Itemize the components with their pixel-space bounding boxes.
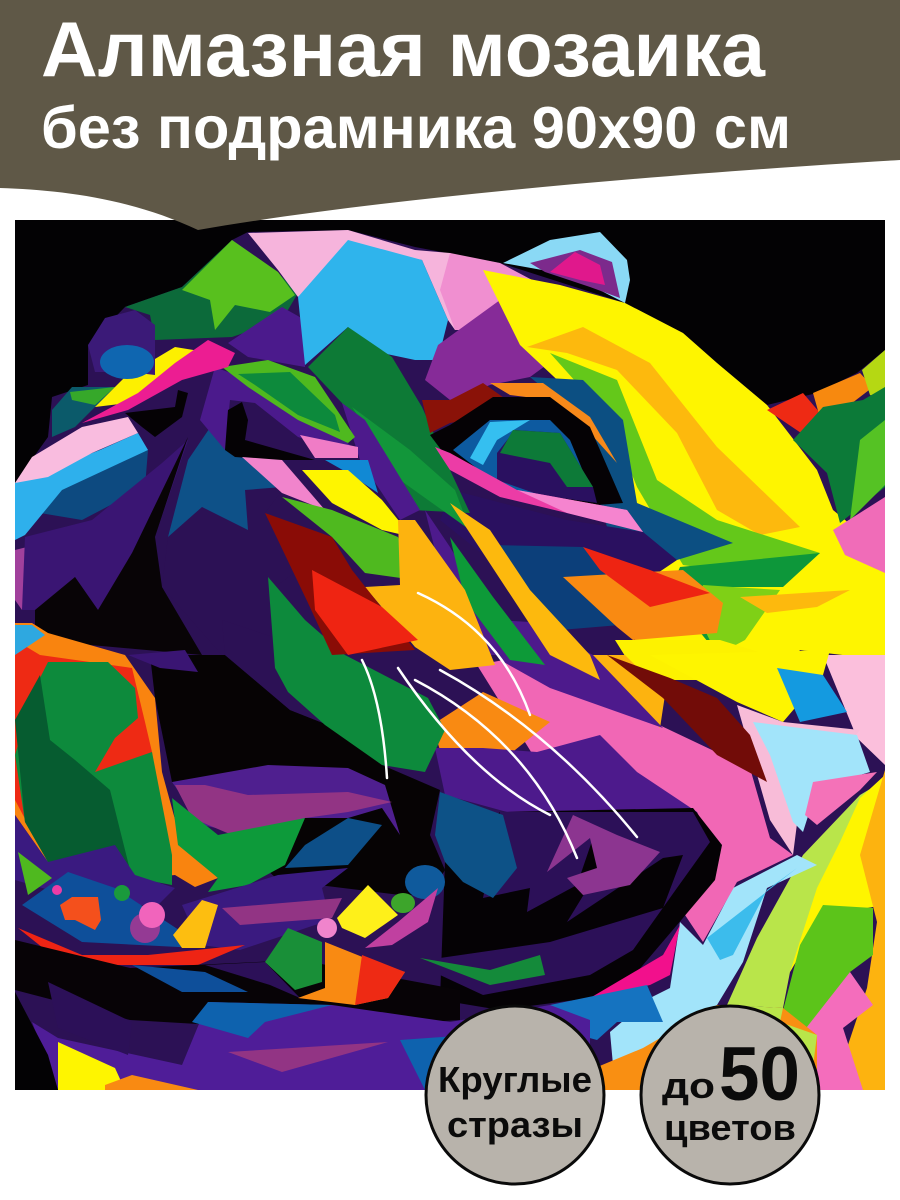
fur: light cyan bbox=[753, 722, 870, 832]
muzzle: blue patch bbox=[325, 460, 378, 493]
nose: pale pink fur bbox=[15, 417, 138, 483]
ear: blue blob bbox=[100, 345, 154, 379]
tongue: red inner bbox=[15, 640, 172, 880]
fur: light cyan lower bbox=[610, 855, 817, 1065]
chin left black bbox=[15, 992, 58, 1090]
lip: mauve bbox=[222, 898, 342, 925]
tongue: green lower bbox=[172, 798, 305, 892]
muzzle: bright red bbox=[312, 570, 418, 655]
lip: purple below tongue bbox=[182, 868, 348, 950]
lip: lime corner bbox=[18, 852, 52, 895]
tongue: mauve bbox=[175, 785, 392, 835]
nose: left strip dark bbox=[52, 387, 115, 437]
lip: red part bbox=[355, 955, 405, 1005]
ear: right back bbox=[767, 350, 885, 573]
nose: blue bbox=[168, 410, 282, 537]
painting: rainbow dog bbox=[15, 220, 885, 1090]
lip: orange bbox=[298, 942, 405, 1005]
fur: orange below eye bbox=[563, 570, 723, 640]
muzzle: purple main bbox=[435, 735, 697, 812]
tongue: green bbox=[15, 662, 172, 885]
muzzle: green stripe bbox=[450, 537, 545, 665]
muzzle: top purple bbox=[128, 650, 198, 672]
fur: lime strip bbox=[727, 788, 874, 1008]
fur: bright green stripe bbox=[352, 407, 470, 530]
fur: green lower bbox=[678, 553, 820, 640]
muzzle: mauve lip bbox=[547, 815, 660, 895]
nose: purple above bbox=[200, 367, 358, 457]
badge: up to 50 colours bbox=[641, 1006, 819, 1184]
fur: pink brow bbox=[440, 253, 531, 330]
chin orange bbox=[105, 1075, 198, 1090]
fur: orange bottom bbox=[590, 1005, 817, 1090]
muzzle: purple stripe bbox=[425, 510, 530, 655]
head silhouette bbox=[15, 230, 885, 1090]
nose: left nostril bbox=[125, 390, 188, 437]
badge: up to 50 colours: цветов bbox=[664, 1107, 796, 1148]
fur: dark blue below eye bbox=[500, 545, 616, 630]
fur: forehead dark green bbox=[125, 240, 298, 340]
muzzle: yellow fur bbox=[302, 470, 412, 537]
subtitle: без подрамника 90х90 см bbox=[41, 95, 791, 161]
nose: left mauve bbox=[15, 545, 35, 610]
fur: blue lower edge bbox=[550, 985, 663, 1040]
nose: green leaf bbox=[222, 360, 355, 443]
fur: blue tuft bbox=[777, 668, 847, 722]
chin yellow bbox=[58, 1042, 125, 1090]
fur: orange right bbox=[848, 770, 885, 1090]
nose: pink above bbox=[300, 435, 358, 458]
muzzle: black mouth bbox=[150, 655, 445, 895]
chin blue right bbox=[400, 1035, 470, 1090]
fur: red below eye bbox=[583, 547, 710, 607]
title: Алмазная мозаика bbox=[41, 5, 766, 93]
lower black band bbox=[15, 940, 460, 1030]
nose: right purple bbox=[162, 420, 300, 655]
fur: forehead blue bbox=[298, 240, 448, 377]
fur: pink tuft bottom bbox=[803, 972, 873, 1090]
ear: right top bbox=[503, 232, 630, 303]
fur: cyan stripe bbox=[707, 868, 797, 960]
fur: dark blue band bbox=[530, 377, 733, 560]
nose: dark blue left bbox=[22, 450, 148, 520]
chin blue bbox=[192, 1002, 332, 1038]
badge: round rhinestones: стразы bbox=[447, 1104, 583, 1145]
nose: light blue fur bbox=[15, 433, 148, 540]
muzzle: dark purple jowl bbox=[440, 812, 710, 995]
fur: lower right pink bbox=[823, 655, 885, 765]
fur: forehead pink bbox=[248, 230, 455, 330]
tongue: dark green bbox=[15, 675, 130, 870]
fur: dark under-eye purple bbox=[440, 492, 677, 572]
lip: green strip bbox=[420, 955, 545, 985]
teeth bbox=[52, 865, 445, 948]
badge: round rhinestones bbox=[426, 1006, 604, 1184]
badge: round rhinestones: Круглые bbox=[438, 1059, 592, 1100]
nose: yellow strip bbox=[95, 347, 212, 407]
badge: up to 50 colours: до bbox=[662, 1065, 715, 1106]
lip: purple mid bbox=[205, 962, 300, 998]
muzzle: dark red stripe bbox=[607, 655, 767, 782]
nose: pink strip bbox=[82, 340, 235, 423]
fur: green fur band bbox=[308, 327, 470, 513]
fur: pale pink edge bbox=[737, 705, 860, 855]
lip: blue area bbox=[22, 872, 198, 948]
fur: orange band bbox=[527, 327, 800, 535]
lip: green patch bbox=[265, 928, 322, 990]
fur: green tuft bbox=[780, 905, 873, 1035]
muzzle: purple flank bbox=[222, 620, 340, 725]
fur: lime band bbox=[550, 353, 820, 580]
nose: centre black bbox=[35, 437, 202, 655]
fur: lime lower bbox=[702, 585, 780, 645]
nose: right nostril bbox=[225, 402, 315, 460]
muzzle: blue bbox=[435, 792, 517, 898]
fur: yellow cheek bbox=[696, 650, 829, 722]
muzzle: orange bbox=[365, 520, 495, 670]
eye bbox=[422, 383, 643, 532]
lip: blue left bbox=[132, 965, 248, 992]
fur: pink tuft right bbox=[805, 772, 877, 825]
nose: left green bbox=[70, 387, 115, 405]
tongue: purple top bbox=[172, 765, 400, 835]
whiskers bbox=[362, 593, 637, 858]
chin purple bbox=[32, 1002, 590, 1090]
fur: yellow lower patch bbox=[615, 640, 736, 680]
fur: purple stripe bbox=[342, 403, 420, 520]
chin mauve bbox=[228, 1042, 388, 1072]
muzzle: black mouth corner bbox=[440, 808, 722, 1010]
muzzle: orange patch bbox=[432, 692, 550, 762]
muzzle: pink fur bbox=[242, 457, 325, 510]
lip: red line bbox=[18, 928, 245, 965]
muzzle: green bbox=[268, 577, 445, 772]
muzzle: pink band bbox=[477, 655, 793, 942]
lip: left purple bbox=[15, 815, 175, 905]
fur: forehead purple bbox=[228, 307, 305, 367]
muzzle: orange stripe long bbox=[450, 503, 600, 680]
fur: lime bottom bbox=[746, 1006, 817, 1061]
tongue: blue tip bbox=[15, 625, 45, 655]
badge: up to 50 colours: 50 bbox=[719, 1032, 800, 1117]
muzzle: orange stripe bbox=[590, 655, 665, 728]
fur: big yellow bbox=[483, 270, 885, 655]
muzzle: dark red bbox=[265, 513, 415, 655]
muzzle: lime fur bbox=[282, 497, 415, 580]
muzzle: magenta corner bbox=[590, 925, 680, 998]
fur: purple brow bbox=[425, 301, 544, 400]
header banner bbox=[0, 0, 900, 230]
fur: forehead light green bbox=[182, 240, 295, 330]
nose: left purple bbox=[22, 440, 188, 610]
tongue: orange outline bbox=[15, 623, 218, 887]
fur: yellow right bbox=[790, 775, 885, 972]
muzzle: upper purple bbox=[493, 620, 663, 728]
ear: left purple bbox=[88, 310, 155, 375]
fur: orange patch right bbox=[740, 590, 850, 613]
tongue: blue below bbox=[285, 818, 382, 868]
chin dark bbox=[48, 982, 132, 1055]
